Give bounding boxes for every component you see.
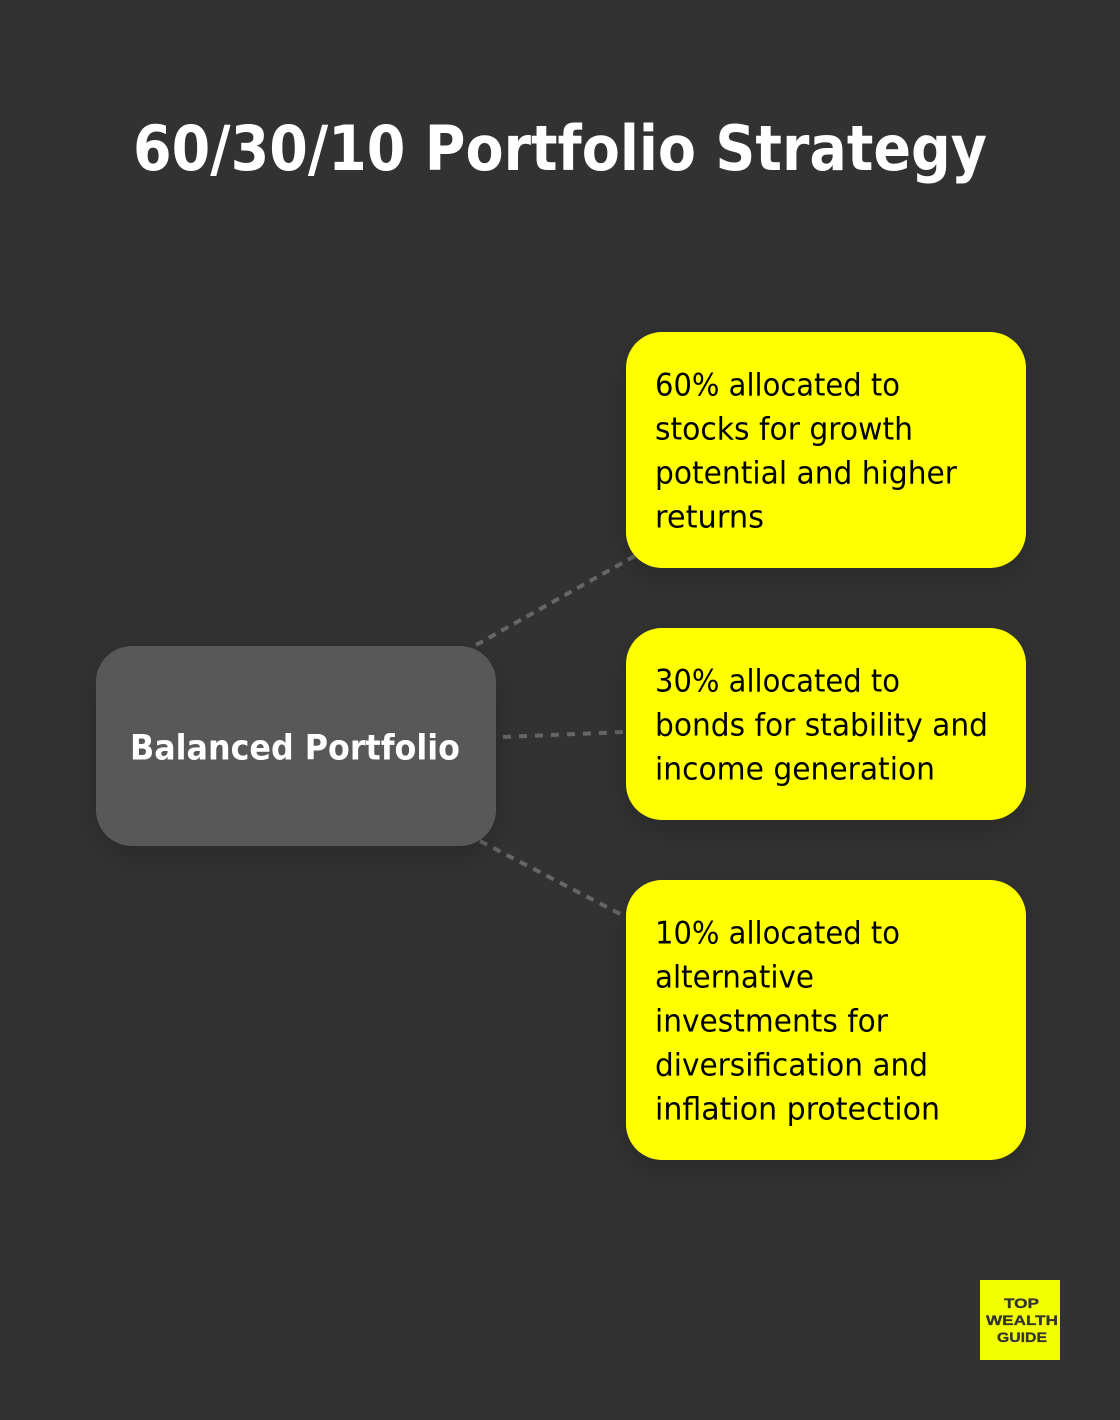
panel: 10% alternatives (626, 880, 1026, 1160)
panel: 60% stocks: 60% allocated to (655, 368, 900, 404)
panel: 30% bonds (626, 628, 1026, 820)
panel: 30% bonds: bonds for stability and (655, 708, 988, 744)
logo: top wealth guide: TOP (1004, 1296, 1039, 1311)
panel: 60% stocks (626, 332, 1026, 568)
logo: top wealth guide (980, 1280, 1060, 1360)
connector: portfolio to stocks (476, 553, 640, 645)
connector: portfolio to alternatives (480, 841, 626, 917)
central node: balanced portfolio (96, 646, 496, 846)
central node: balanced portfolio: Balanced Portfolio (130, 728, 460, 768)
panel: 10% alternatives: investments for (655, 1004, 888, 1040)
panel: 10% alternatives: 10% allocated to (655, 916, 900, 952)
panel: 10% alternatives: diversification and (655, 1048, 928, 1084)
panel: 10% alternatives: alternative (655, 960, 814, 996)
logo: top wealth guide: GUIDE (997, 1330, 1047, 1345)
panel: 60% stocks: returns (655, 500, 764, 536)
logo: top wealth guide: WEALTH (986, 1313, 1058, 1328)
panel: 10% alternatives: inflation protection (655, 1092, 940, 1128)
panel: 60% stocks: potential and higher (655, 456, 957, 492)
panel: 30% bonds: income generation (655, 752, 935, 788)
title: 60/30/10 Portfolio Strategy (133, 112, 987, 185)
connector: portfolio to bonds (503, 732, 624, 737)
panel: 60% stocks: stocks for growth (655, 412, 913, 448)
panel: 30% bonds: 30% allocated to (655, 664, 900, 700)
